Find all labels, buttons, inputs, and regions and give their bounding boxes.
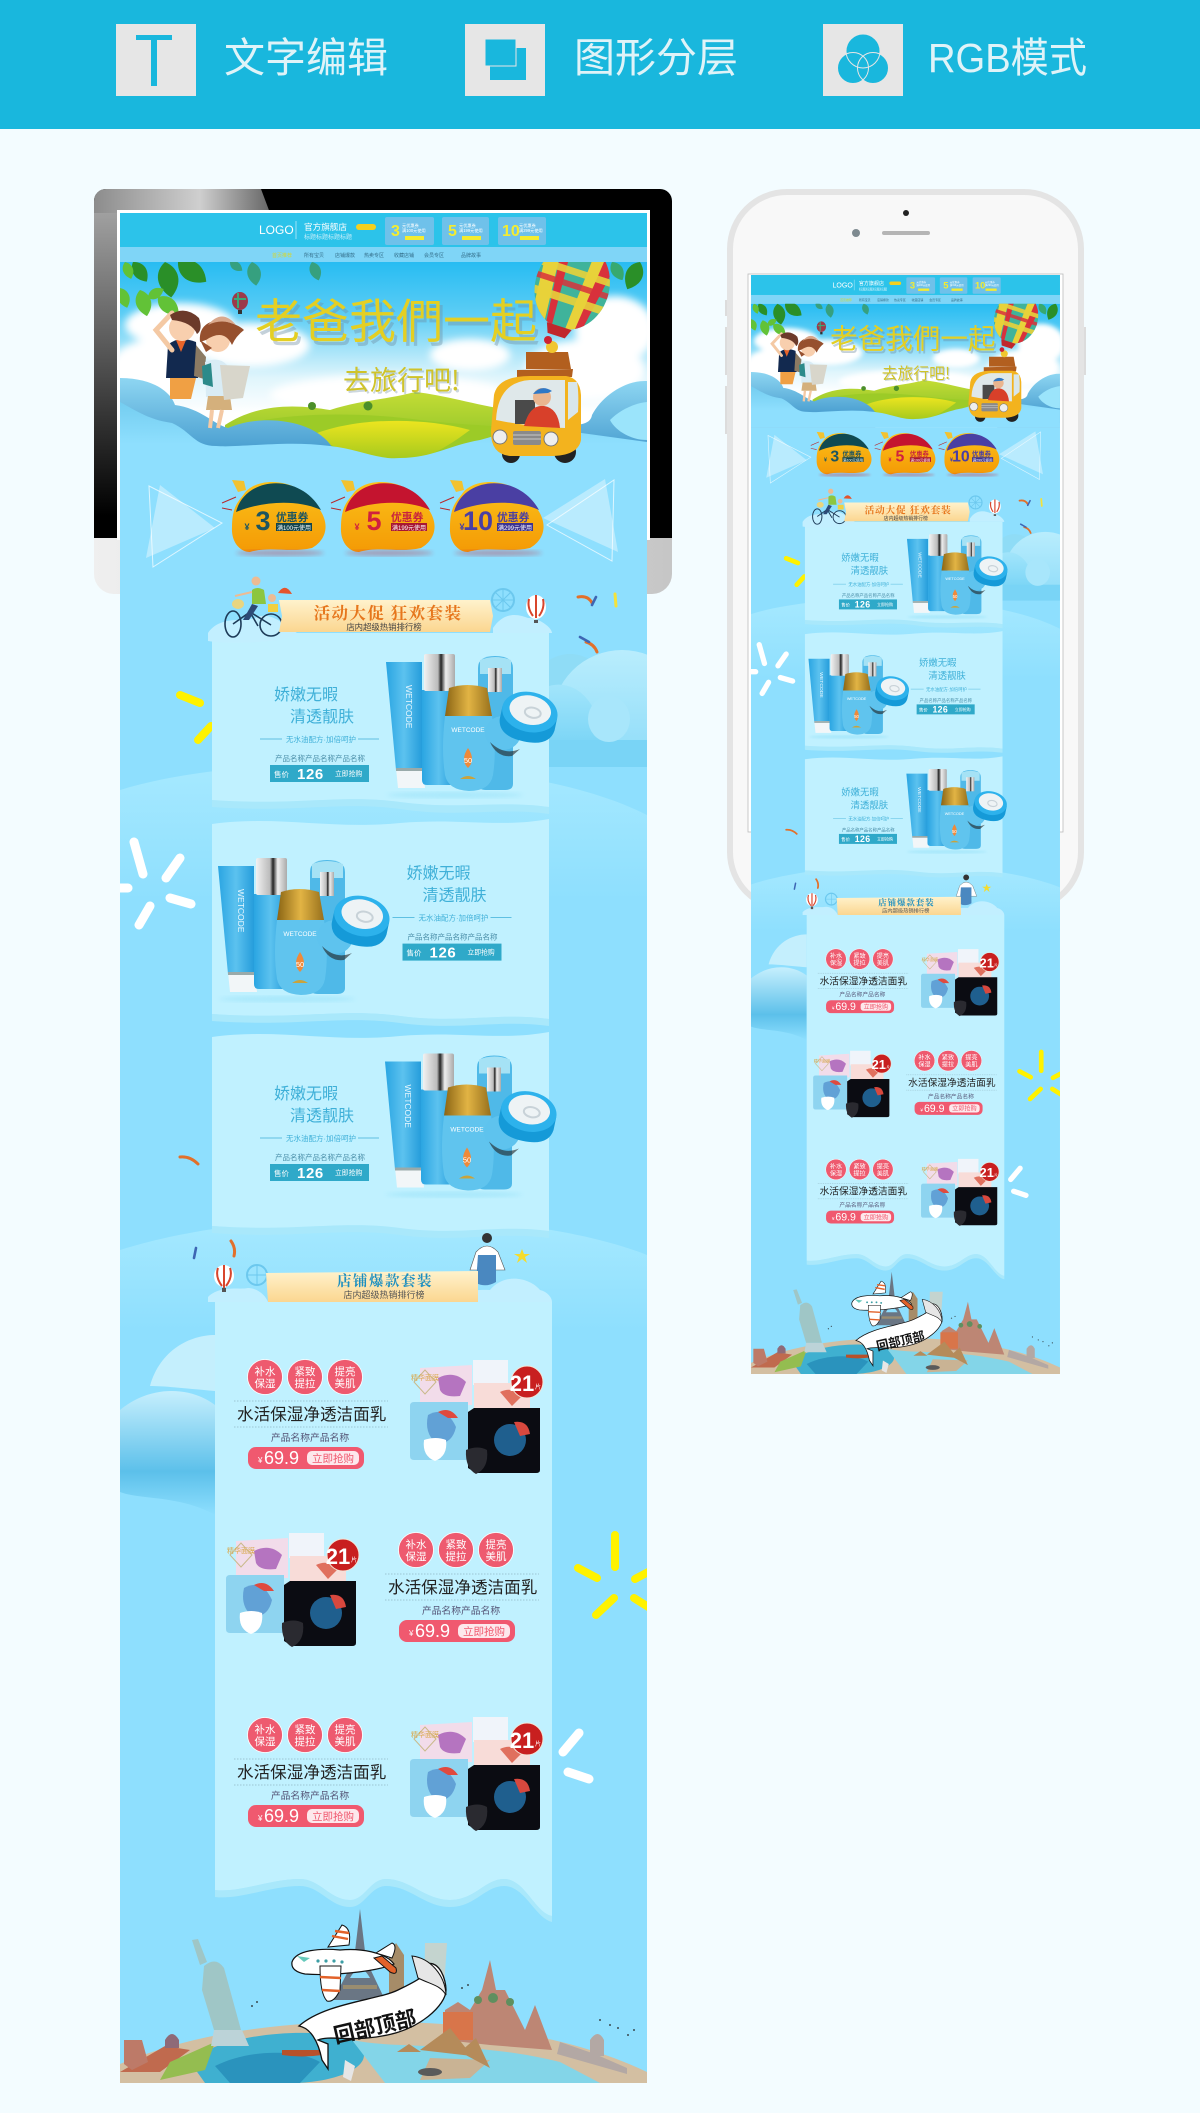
coupon tickets: [385, 217, 546, 245]
coupon tickets: 3: [391, 223, 400, 240]
mobile item 1: [818, 949, 908, 1013]
mobile hero title: 去旅行吧!: [883, 362, 951, 385]
mask set 1: [410, 1360, 543, 1474]
mobile panel 2 copy: 娇嫩无暇: [919, 657, 957, 668]
mobile back to top label: 回部顶部: [875, 1328, 926, 1354]
label: rgb mode: RGB模式: [928, 35, 1087, 81]
hero title: [255, 283, 540, 400]
section 1 header art: [208, 576, 552, 643]
mobile item 2: 水活保湿净透洁面乳: [908, 1076, 996, 1089]
item 3: 立即抢购: [312, 1810, 354, 1823]
mobile panel 3 copy: [833, 787, 903, 844]
icon: layers: [465, 24, 545, 96]
mobile product panel 2: [805, 631, 1003, 749]
mobile mask set 2: [813, 1051, 891, 1118]
mobile benefit badges: 提亮: [965, 1054, 978, 1062]
panel 3 copy: 无水油配方·加倍呵护: [286, 1133, 356, 1143]
hero title: 老爸我們一起: [258, 287, 540, 356]
section 2 banner: 店内超级热销排行榜: [343, 1289, 425, 1300]
benefit badges: 美肌: [334, 1377, 356, 1390]
coupon bag: 5 yuan: 满199元使用: [392, 524, 426, 532]
mobile coupon bag: 3 yuan: 优惠券: [842, 449, 862, 458]
monitor frame: [94, 189, 672, 594]
coupon bag: 3 yuan: 3: [255, 506, 271, 536]
panel 1 copy: 126: [297, 766, 324, 783]
mobile benefit badges: [826, 1159, 893, 1180]
mobile coupon bag: 5 yuan: 优惠券: [910, 449, 930, 458]
mobile coupon bag: 10 yuan: ¥: [950, 457, 953, 463]
mobile benefit badges: 提亮: [877, 1162, 889, 1170]
mobile panel 3 copy: 清透靓肤: [851, 800, 889, 811]
products 2: [218, 858, 393, 1002]
mobile item 3: [818, 1159, 908, 1224]
mobile nav bar: 会员专区: [929, 297, 941, 302]
nav bar: 首页推荐: [272, 252, 292, 259]
item 2: ¥: [408, 1629, 414, 1638]
mobile coupon tickets: 元优惠券: [950, 280, 960, 284]
mobile panel 1 copy: 产品名称产品名称产品名称: [842, 592, 895, 599]
item 1: 水活保湿净透洁面乳: [237, 1405, 386, 1424]
hero title: 去旅行吧!: [345, 361, 462, 400]
section 1 banner: [279, 600, 493, 632]
icon: rgb mode: [823, 24, 903, 96]
benefit badges: 提亮: [334, 1365, 356, 1378]
coupon bag: 10 yuan: 满299元使用: [498, 524, 532, 532]
mobile item 1: 立即抢购: [864, 1003, 888, 1011]
mobile item 3: 69.9: [835, 1212, 856, 1224]
shop header bar: 官方旗舰店: [304, 221, 347, 232]
mobile shop header bar: LOGO: [832, 282, 853, 289]
item 1: 立即抢购: [312, 1452, 354, 1465]
mobile section 1 header art: [803, 489, 1004, 528]
section 1 banner: 店内超级热销排行榜: [346, 622, 422, 632]
mobile products 2: [808, 654, 911, 739]
nav bar: 店铺爆款: [335, 252, 355, 259]
mobile coupon bag: 3 yuan: 3: [830, 448, 839, 465]
mobile item 1: ¥: [832, 1006, 835, 1011]
mobile shop header bar: 官方旗舰店: [859, 280, 884, 287]
mobile nav bar: 品牌故事: [951, 297, 963, 302]
mobile panel 3 copy: 126: [855, 834, 870, 844]
back to top label: 回部顶部: [332, 2007, 419, 2048]
nav bar: [120, 247, 647, 262]
mobile coupon tickets: [906, 277, 1001, 294]
benefit badges: 提拉: [446, 1550, 467, 1563]
coupon bag: 5 yuan: 5: [366, 506, 382, 536]
panel 3 copy: 售价: [274, 1168, 289, 1178]
coupon tickets: 满199元使用: [459, 227, 483, 234]
panel 1 copy: [260, 686, 379, 783]
coupon tickets: 满299元使用: [519, 227, 543, 234]
mobile coupon tickets: 元优惠券: [916, 280, 927, 284]
benefit badges: 保湿: [254, 1377, 276, 1390]
item 2: 产品名称产品名称: [422, 1604, 500, 1617]
item 1: 产品名称产品名称: [271, 1431, 349, 1444]
mobile hero title: 老爸我們一起: [830, 316, 995, 356]
item 3: [234, 1718, 388, 1827]
mobile coupon tickets: 10: [975, 280, 985, 291]
mobile panel 3 copy: 售价: [841, 836, 851, 843]
mobile panel 3 copy: 娇嫩无暇: [841, 787, 879, 798]
benefit badges: 补水: [254, 1723, 276, 1736]
mobile item 1: 水活保湿净透洁面乳: [820, 974, 907, 987]
shop header bar: LOGO: [259, 223, 294, 237]
coupon tickets: 5: [448, 223, 457, 240]
panel 2 copy: 产品名称产品名称产品名称: [408, 932, 498, 942]
mobile item 3: 立即抢购: [864, 1213, 888, 1221]
coupon bag: 10 yuan: 10: [463, 506, 493, 536]
mobile section 1 banner: 店内超级热销排行榜: [884, 515, 928, 522]
hero title: 去旅行吧!: [343, 359, 460, 398]
panel 3 copy: 126: [297, 1165, 324, 1182]
benefit badges: 紧致: [294, 1365, 316, 1378]
coupon bag: 10 yuan: 优惠券: [497, 510, 530, 524]
coupon tickets: 元优惠券: [402, 222, 420, 229]
panel 1 copy: 娇嫩无暇: [274, 686, 338, 704]
mobile nav bar: 所有宝贝: [859, 297, 871, 302]
nav bar: 会员专区: [424, 252, 444, 259]
benefit badges: [398, 1532, 514, 1568]
benefit badges: 补水: [406, 1538, 427, 1551]
mobile item 2: 69.9: [924, 1103, 945, 1115]
mobile coupon bag: 10 yuan: 10: [952, 448, 970, 465]
panel 3 copy: 立即抢购: [335, 1168, 362, 1177]
mobile coupon bag: 10 yuan: 满299元使用: [973, 457, 993, 462]
nav bar: 热卖专区: [364, 252, 384, 259]
mobile item 2: [906, 1050, 997, 1115]
label: layers: 图形分层: [574, 35, 738, 81]
mask set 2: [226, 1533, 359, 1647]
panel 3 copy: [260, 1085, 379, 1182]
mobile coupon tickets: 满299元使用: [985, 283, 999, 287]
item 1: 69.9: [264, 1448, 299, 1468]
coupon tickets: 元优惠券: [459, 222, 477, 229]
mobile page decor background: [751, 275, 1086, 1374]
benefit badges: 提拉: [294, 1377, 316, 1390]
mobile section 2 banner: [837, 897, 961, 915]
mobile mask set 1: [921, 949, 999, 1016]
mobile product panel 1: [805, 522, 1003, 624]
item 1: [234, 1360, 388, 1469]
coupon bag: 10 yuan: [440, 480, 544, 556]
panel 1 copy: 清透靓肤: [290, 708, 354, 726]
mobile benefit badges: 紧致: [853, 952, 866, 960]
mobile nav bar: 店铺爆款: [877, 297, 889, 302]
item 3: 水活保湿净透洁面乳: [237, 1763, 386, 1782]
benefit badges: 保湿: [406, 1550, 427, 1563]
mobile coupon bag: 5 yuan: 满199元使用: [910, 457, 931, 462]
coupon tickets: 10: [502, 223, 520, 240]
mobile coupon bag: 3 yuan: 满100元使用: [843, 457, 863, 462]
benefit badges: 补水: [254, 1365, 276, 1378]
mobile panel 3 copy: 产品名称产品名称产品名称: [842, 827, 895, 834]
mobile panel 1 copy: 无水油配方·加倍呵护: [848, 581, 890, 588]
item 2: 水活保湿净透洁面乳: [388, 1578, 537, 1597]
mobile hero illustration: [745, 285, 1065, 427]
item 3: 产品名称产品名称: [271, 1789, 349, 1802]
mobile item 1: 产品名称产品名称: [839, 991, 886, 999]
label: text edit: 文字编辑: [224, 35, 388, 81]
mobile coupon bag: 5 yuan: ¥: [888, 457, 891, 463]
mobile coupon tickets: 3: [910, 280, 915, 291]
mobile panel 1 copy: 126: [855, 600, 870, 610]
panel 1 copy: 无水油配方·加倍呵护: [286, 734, 356, 744]
mobile nav bar: 热卖专区: [894, 297, 906, 302]
mobile panel 2 copy: 立即抢购: [955, 706, 971, 712]
mobile coupon bag: 5 yuan: [875, 432, 935, 477]
section 1 banner: 活动大促 狂欢套装: [314, 600, 462, 624]
item 3: ¥: [257, 1814, 263, 1823]
mobile hero title: 去旅行吧!: [882, 361, 950, 384]
phone frame: [725, 189, 1086, 912]
benefit badges: [248, 1718, 362, 1752]
panel 2 copy: 售价: [406, 948, 422, 958]
mobile panel 3 copy: 无水油配方·加倍呵护: [848, 815, 890, 822]
mobile section 2 banner: 店内超级热销排行榜: [882, 907, 929, 915]
mobile benefit badges: 紧致: [942, 1054, 954, 1062]
mobile benefit badges: 保湿: [918, 1061, 931, 1069]
panel 2 copy: 娇嫩无暇: [406, 865, 471, 883]
mobile section 2 banner: 店铺爆款套装: [878, 897, 934, 909]
shop header bar: [120, 213, 647, 247]
coupon bag: 5 yuan: [331, 480, 435, 556]
benefit badges: 紧致: [294, 1723, 316, 1736]
mobile benefit badges: 提亮: [877, 952, 889, 960]
panel 2 copy: 126: [430, 945, 456, 962]
mobile mask set 3: [921, 1159, 999, 1226]
mobile shop header bar: [751, 275, 1060, 295]
mobile benefit badges: 提拉: [853, 1169, 866, 1177]
mobile coupon tickets: 元优惠券: [985, 280, 995, 284]
mobile coupon bag: 10 yuan: [939, 432, 999, 477]
icon: text edit: [116, 24, 196, 96]
panel 3 copy: 产品名称产品名称产品名称: [275, 1152, 365, 1162]
hero title: 老爸我們一起: [255, 283, 537, 352]
mobile coupon bag: 3 yuan: ¥: [824, 457, 827, 463]
mobile item 2: 立即抢购: [952, 1105, 977, 1113]
panel: product panel 3: [212, 1032, 549, 1231]
products 3: [385, 1054, 560, 1198]
mobile panel 2 copy: [911, 657, 981, 715]
coupon bag: 3 yuan: 优惠券: [276, 510, 309, 524]
mobile item 3: ¥: [832, 1216, 835, 1221]
mobile panel 1 copy: 售价: [841, 601, 851, 608]
panel 2 copy: 无水油配方·加倍呵护: [418, 913, 488, 923]
mobile benefit badges: 保湿: [830, 959, 842, 967]
mobile section 2 header art: [803, 874, 1004, 915]
coupon bag: 3 yuan: [222, 480, 326, 556]
desktop web page: [110, 213, 692, 2083]
coupon bag: 5 yuan: ¥: [354, 522, 360, 532]
mobile section 1 banner: [844, 502, 970, 522]
mobile nav bar: 首页推荐: [840, 297, 852, 302]
mobile nav bar: [751, 295, 1060, 304]
item 1: ¥: [257, 1456, 263, 1465]
top feature band: [0, 0, 1200, 129]
mask set 3: [410, 1717, 543, 1831]
section 2 header art: [208, 1233, 552, 1302]
nav bar: 收藏店铺: [394, 252, 414, 259]
mobile products 1: [907, 534, 1010, 619]
benefit badges: 美肌: [486, 1550, 507, 1563]
mobile benefit badges: 保湿: [830, 1169, 842, 1177]
nav bar: 所有宝贝: [304, 252, 324, 259]
mobile benefit badges: 美肌: [877, 959, 889, 967]
mobile panel 3 copy: 立即抢购: [877, 835, 893, 841]
mobile item 3: 产品名称产品名称: [839, 1201, 886, 1209]
panel 2 copy: 立即抢购: [468, 948, 495, 957]
mobile coupon tickets: 5: [943, 280, 949, 291]
mobile hero title: 老爸我們一起: [832, 319, 997, 359]
benefit badges: 紧致: [446, 1538, 467, 1551]
mobile benefit badges: 美肌: [965, 1061, 978, 1069]
item 2: 69.9: [415, 1621, 450, 1641]
item 2: 立即抢购: [463, 1625, 505, 1638]
mobile shop header bar: 标题标题标题标题: [859, 286, 887, 291]
panel 3 copy: 清透靓肤: [290, 1107, 354, 1125]
mobile benefit badges: 提拉: [853, 959, 866, 967]
panel: product panel 2: [212, 819, 549, 1019]
mobile panel 2 copy: 126: [932, 705, 948, 715]
mobile item 2: 产品名称产品名称: [928, 1092, 974, 1100]
shop header bar: 标题标题标题标题: [304, 233, 352, 241]
mobile item 1: 69.9: [835, 1001, 856, 1013]
panel 1 copy: 产品名称产品名称产品名称: [275, 753, 365, 763]
benefit badges: 提拉: [294, 1735, 316, 1748]
mobile item 2: ¥: [920, 1107, 923, 1112]
mobile nav bar: 收藏店铺: [912, 297, 923, 302]
hero illustration: [110, 230, 655, 472]
nav bar: 品牌故事: [461, 252, 481, 259]
item 3: 69.9: [264, 1806, 299, 1826]
benefit badges: 美肌: [334, 1735, 356, 1748]
mobile benefit badges: 紧致: [853, 1162, 866, 1170]
section 2 banner: [266, 1270, 478, 1302]
world landmarks footer: [120, 1909, 647, 2083]
mobile coupon bag: 5 yuan: 5: [896, 448, 905, 465]
mobile panel 2 copy: 清透靓肤: [928, 670, 966, 681]
mobile coupon bag: 3 yuan: [811, 432, 872, 477]
mobile coupon tickets: 满100元使用: [916, 283, 931, 287]
coupon tickets: 满100元使用: [402, 227, 426, 234]
mobile panel 2 copy: 产品名称产品名称产品名称: [920, 697, 973, 704]
products 1: [386, 654, 561, 798]
coupon bag: 10 yuan: ¥: [459, 522, 465, 532]
panel: hot items: [215, 1302, 552, 1916]
mobile item 3: 水活保湿净透洁面乳: [820, 1185, 907, 1198]
plane and ribbon: [292, 1925, 446, 2069]
mobile products 3: [906, 769, 1009, 854]
mobile panel: hot items: [807, 915, 1004, 1276]
panel 2 copy: [392, 865, 512, 962]
coupon tickets: 元优惠券: [519, 222, 537, 229]
mobile world landmarks footer: [751, 1272, 1060, 1374]
benefit badges: 提亮: [334, 1723, 356, 1736]
mobile benefit badges: 提拉: [942, 1061, 954, 1069]
mobile panel 1 copy: 立即抢购: [877, 601, 893, 607]
section 2 banner: 店铺爆款套装: [337, 1270, 433, 1291]
panel 2 copy: 清透靓肤: [422, 887, 487, 905]
mobile coupon tickets: 满199元使用: [950, 283, 964, 287]
panel 3 copy: 娇嫩无暇: [274, 1085, 338, 1103]
panel: product panel 1: [212, 633, 549, 807]
benefit badges: 提亮: [486, 1538, 506, 1551]
mobile panel 2 copy: 售价: [919, 706, 928, 713]
mobile web page: [745, 275, 1086, 1374]
mobile benefit badges: 补水: [918, 1054, 931, 1062]
mobile benefit badges: 补水: [830, 952, 842, 960]
benefit badges: [248, 1360, 362, 1394]
mobile translucent triangles: [766, 431, 1043, 483]
mobile panel 1 copy: 清透靓肤: [851, 565, 889, 576]
mobile panel 2 copy: 无水油配方·加倍呵护: [926, 686, 968, 693]
coupon bag: 3 yuan: ¥: [244, 522, 250, 532]
mobile hero title: [830, 316, 997, 385]
mobile benefit badges: 美肌: [877, 1169, 889, 1177]
mobile product panel 3: [805, 756, 1003, 873]
mobile section 1 banner: 活动大促 狂欢套装: [865, 503, 952, 517]
mobile panel 1 copy: [833, 552, 903, 610]
coupon bag: 3 yuan: 满100元使用: [277, 524, 311, 532]
benefit badges: 保湿: [254, 1735, 276, 1748]
mobile plane and ribbon: [852, 1281, 942, 1366]
item 2: [385, 1532, 539, 1642]
translucent triangles: [146, 479, 618, 567]
mobile panel 1 copy: 娇嫩无暇: [841, 552, 879, 563]
mobile coupon bag: 10 yuan: 优惠券: [972, 449, 992, 458]
coupon bag: 5 yuan: 优惠券: [391, 510, 424, 524]
mobile benefit badges: [826, 949, 893, 969]
panel 1 copy: 售价: [274, 769, 289, 779]
mobile benefit badges: [914, 1050, 982, 1071]
mobile benefit badges: 补水: [830, 1162, 842, 1170]
panel 1 copy: 立即抢购: [335, 769, 362, 778]
page decor background: [120, 213, 692, 2083]
